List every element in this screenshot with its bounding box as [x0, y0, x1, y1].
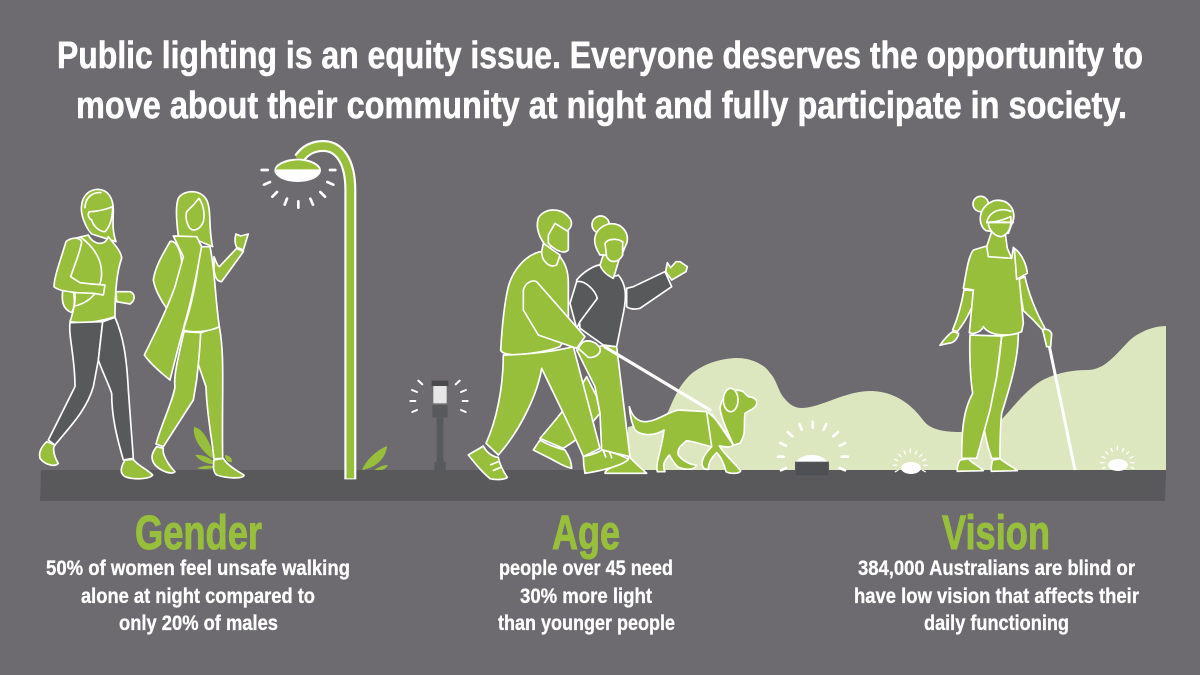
text: vision statistic: have low vision that affects their	[854, 585, 1139, 608]
panel: gender	[46, 507, 350, 635]
text: vision statistic: daily functioning	[924, 612, 1069, 635]
text: age statistic: people over 45 need	[499, 557, 673, 580]
person: woman in long coat with cup	[144, 192, 248, 478]
guide dog	[629, 388, 757, 473]
text: age statistic: 30% more light	[520, 585, 652, 608]
heading: gender: Gender	[135, 507, 262, 560]
panel: age	[498, 507, 675, 635]
leash	[605, 347, 710, 410]
text: gender statistic	[46, 557, 350, 635]
heading: age: Age	[552, 507, 620, 560]
text: vision statistic: 384,000 Australians are blind or	[858, 557, 1135, 580]
ground	[40, 470, 1166, 501]
heading: vision: Vision	[942, 507, 1050, 560]
background hills	[628, 326, 1166, 470]
text: age statistic	[498, 557, 675, 635]
street lamp	[262, 146, 350, 479]
text: vision statistic	[854, 557, 1139, 635]
ground light: large	[778, 422, 848, 476]
text: gender statistic: only 20% of males	[119, 612, 278, 635]
ground light: small centre	[893, 449, 927, 474]
panel: vision	[854, 507, 1139, 635]
text: age statistic: than younger people	[498, 612, 675, 635]
ground light: small right	[1101, 446, 1134, 471]
plants	[194, 427, 388, 471]
text: gender statistic: alone at night compared to	[81, 585, 315, 608]
bollard light	[410, 381, 468, 473]
text: gender statistic: 50% of women feel unsafe walking	[46, 557, 350, 580]
person: jogging woman with backpack	[40, 189, 153, 479]
person: woman with white cane and glasses	[940, 196, 1075, 471]
title	[57, 35, 1143, 127]
people: older woman guiding man	[468, 210, 687, 480]
